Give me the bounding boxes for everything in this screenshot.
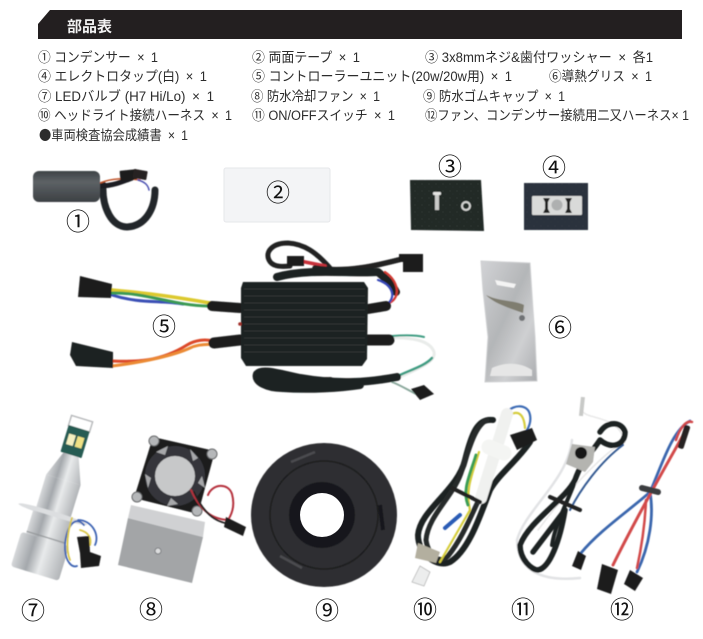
part 8: cooling fan with bracket (118, 436, 246, 583)
parts list text: ② 両面テープ × 1 (252, 50, 360, 65)
right lower wires (368, 335, 434, 400)
number labels: ⑥ (548, 308, 572, 343)
rubber cap centre hole (300, 493, 344, 537)
number labels: ⑩ (413, 590, 437, 625)
part 5: controller unit (70, 243, 434, 400)
lower bundled cable (257, 371, 397, 389)
number labels: ⑤ (152, 307, 176, 342)
number labels: ③ (438, 147, 462, 182)
number labels: ⑧ (139, 590, 163, 625)
left wires and connectors (70, 276, 240, 368)
part 7: LED bulb (0, 408, 117, 584)
parts list text: ⑧ 防水冷却ファン × 1 (251, 89, 380, 104)
control box (241, 282, 368, 366)
part 4: electro tap on foam (524, 183, 588, 230)
parts list text: ⑪ ON/OFFスイッチ × 1 (252, 108, 395, 123)
part 1: condenser (33, 169, 155, 227)
number labels: ⑦ (21, 591, 45, 626)
top cable loop (268, 243, 423, 309)
parts list text: ⑤ コントローラーユニット(20w/20w用) × 1 (252, 69, 512, 84)
part 9: rubber waterproof cap (251, 443, 397, 587)
parts list text: ④ エレクトロタップ(白) × 1 (38, 69, 207, 84)
parts list text: ●車両検査協会成績書 × 1 (39, 124, 188, 144)
number labels: ④ (542, 148, 566, 183)
number labels: ⑫ (610, 590, 634, 625)
title text: 部品表 (67, 18, 112, 36)
fan wire and plug (191, 486, 246, 536)
number labels: ⑨ (315, 591, 339, 626)
part 10: headlight harness (412, 406, 537, 586)
part 2: double-sided tape (224, 168, 330, 222)
parts list text: ⑩ ヘッドライト接続ハーネス × 1 (38, 107, 232, 123)
parts list text: ① コンデンサー × 1 (38, 49, 158, 65)
parts list text: ③ 3x8mmネジ&歯付ワッシャー × 各1 (425, 50, 653, 65)
part 12: bifurcated harness (572, 421, 692, 594)
number labels (21, 147, 634, 626)
part 11: on/off switch (517, 397, 625, 579)
parts list text (38, 49, 689, 144)
part 6: thermal grease pouch (481, 261, 537, 382)
parts list text: ⑨ 防水ゴムキャップ × 1 (423, 88, 565, 104)
parts list text: ⑦ LEDバルブ (H7 Hi/Lo) × 1 (38, 88, 214, 104)
title bar (38, 10, 682, 39)
number labels: ① (66, 202, 90, 237)
number labels: ⑪ (511, 590, 535, 625)
part 3: screw and washer on foam (410, 180, 484, 231)
parts list text: ⑥導熱グリス × 1 (549, 69, 652, 84)
number labels: ② (266, 173, 290, 208)
bulb wires and connector (65, 518, 101, 568)
